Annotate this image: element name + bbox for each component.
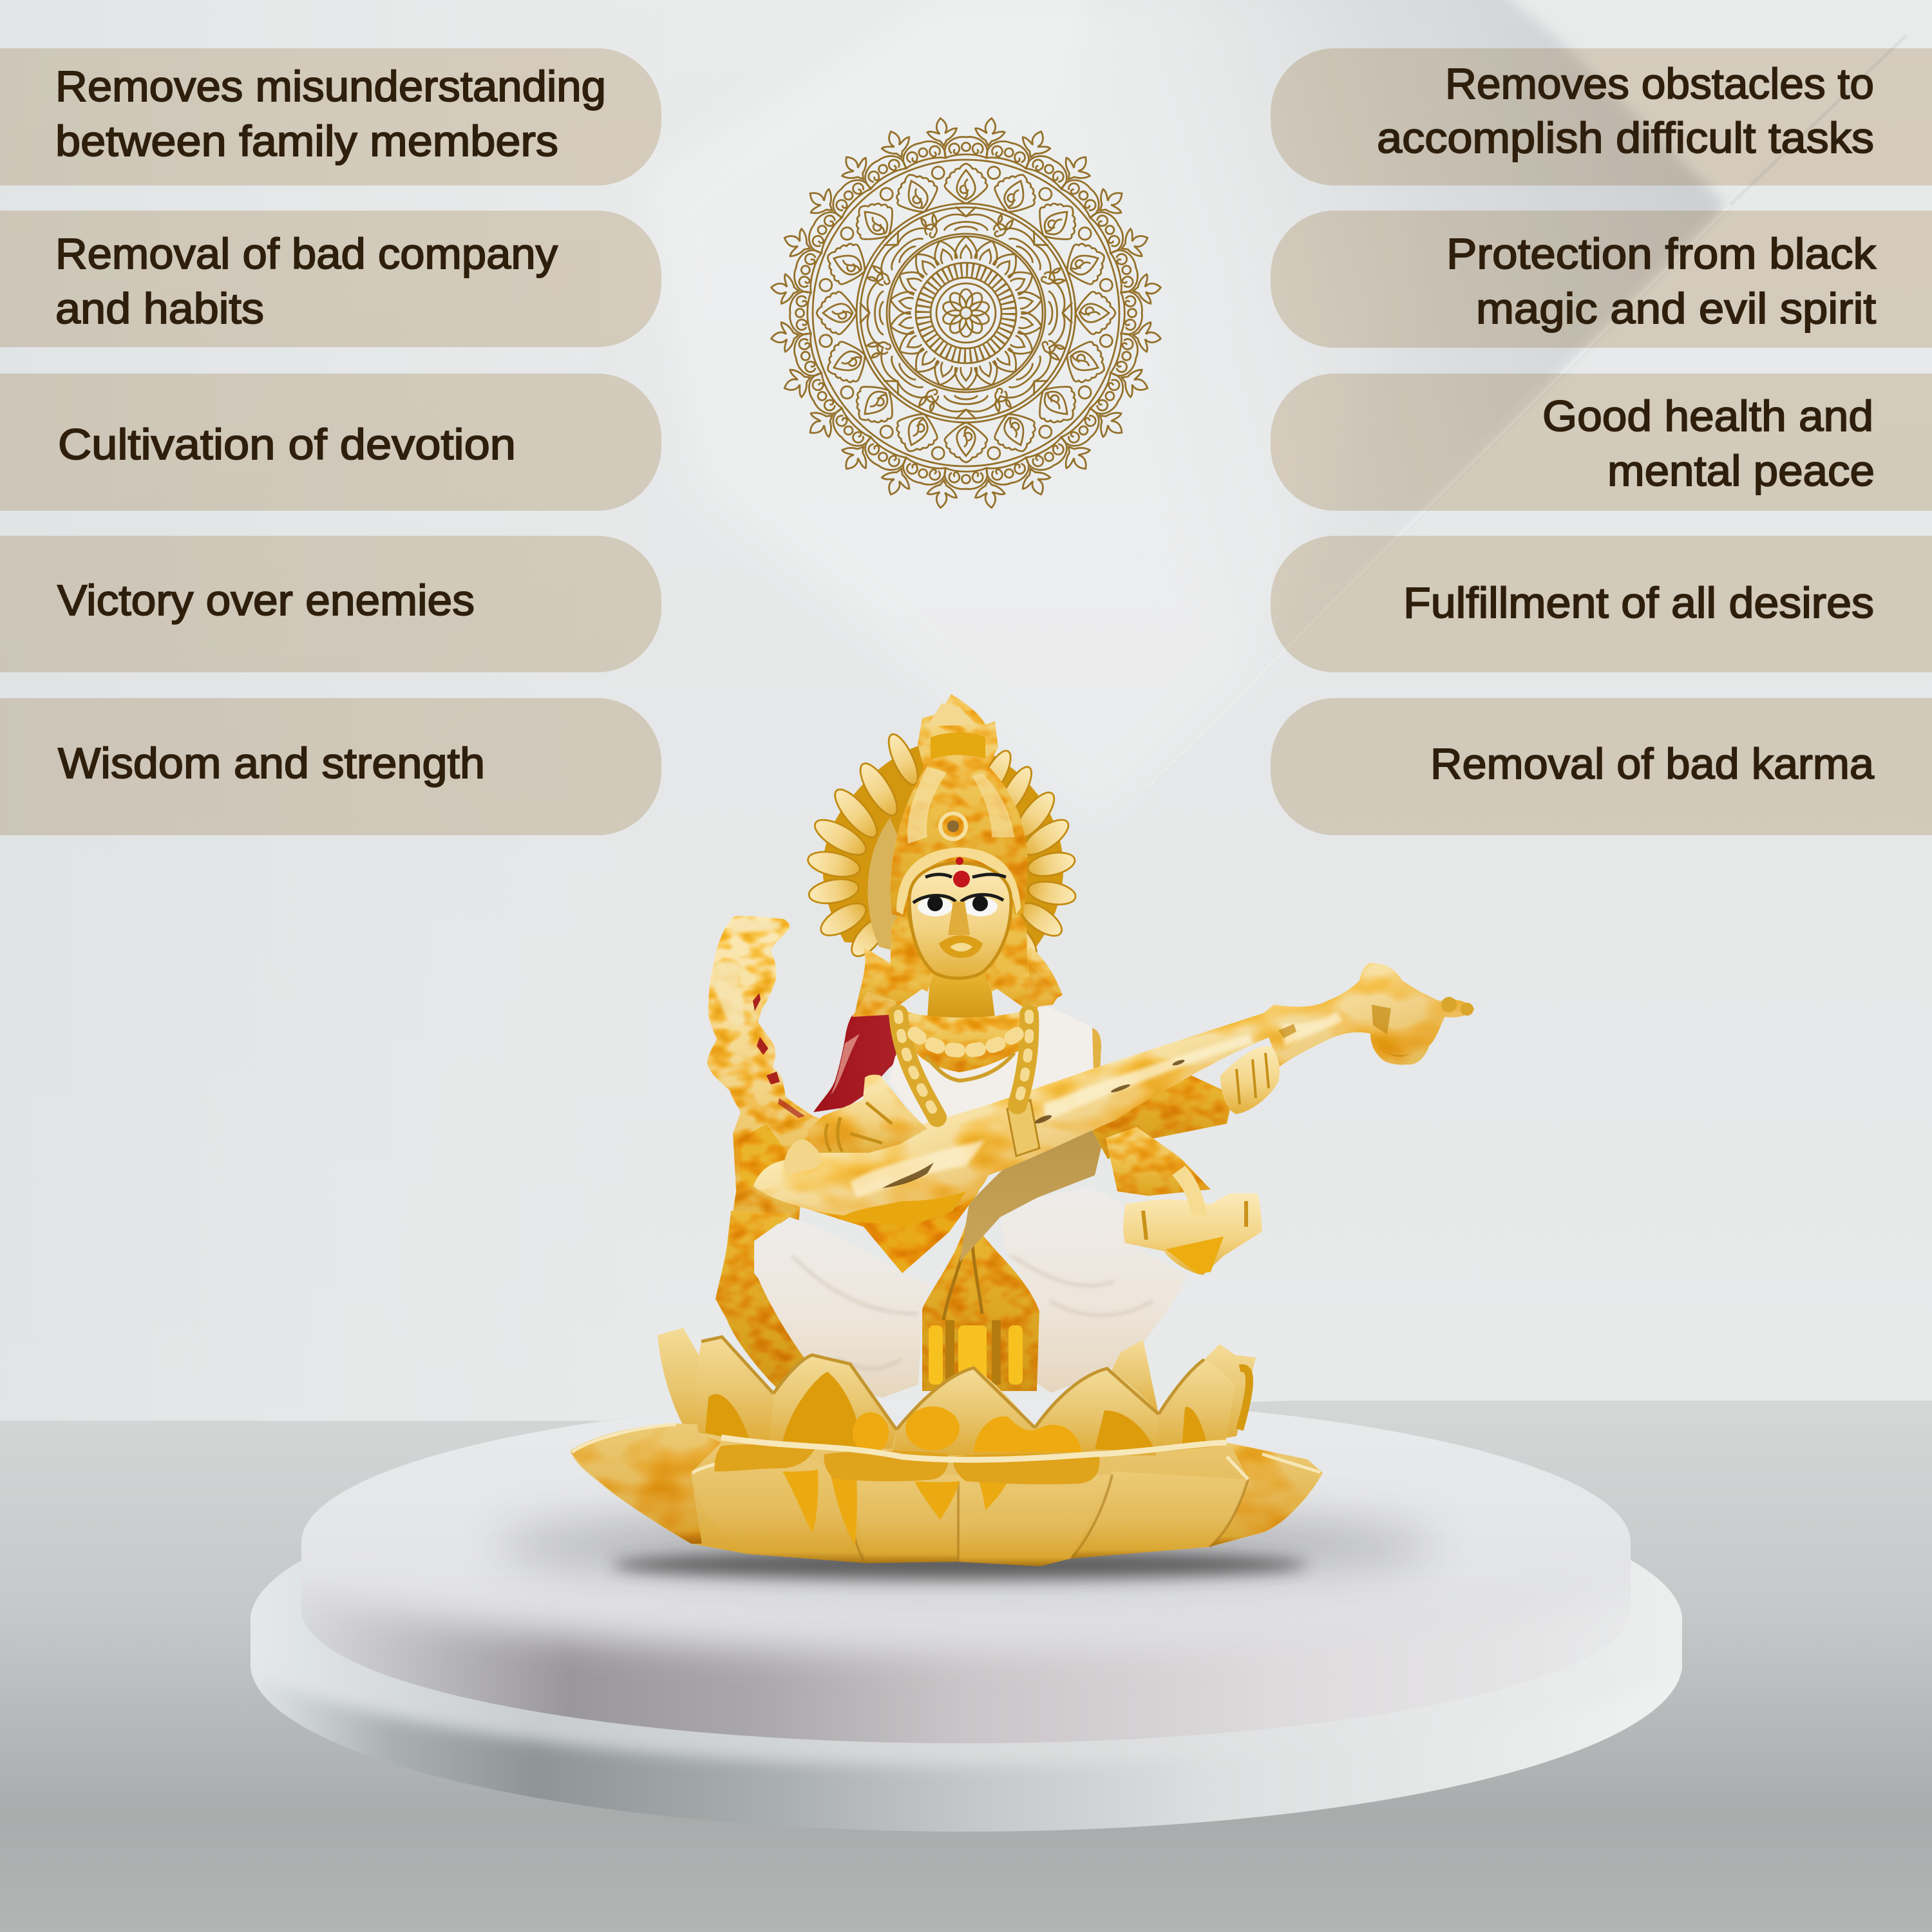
- arm highlights: [716, 919, 781, 1025]
- orange knobs: [853, 1406, 1082, 1454]
- halo ribs: [806, 730, 1077, 964]
- veena dark specks: [882, 1059, 1185, 1188]
- right knee: [1000, 1187, 1188, 1393]
- pill: bad company: and habits: [55, 285, 264, 333]
- pill: devotion: [0, 374, 661, 511]
- pill: desires: Fulfillment of all desires: [1403, 579, 1874, 627]
- irises: [927, 896, 988, 911]
- pill: family members: [0, 48, 661, 185]
- under-neck gold and right arm: [960, 1075, 1233, 1262]
- hip highlight: [737, 1124, 792, 1191]
- statue: Saraswati on lotus: [571, 694, 1475, 1566]
- pill: devotion: Cultivation of devotion: [58, 421, 516, 469]
- hand on veena neck: [1220, 1046, 1280, 1114]
- veena shine: [850, 1011, 1343, 1198]
- earrings and hair: [890, 902, 1028, 992]
- petal seams: [844, 1475, 1248, 1563]
- statue shadow: [496, 1515, 1436, 1579]
- chest necklace thin: [925, 1053, 1014, 1081]
- petal rim band: [721, 1437, 1227, 1460]
- background wall: [0, 0, 1932, 1481]
- pill: desires: [1271, 536, 1932, 672]
- icon: mandala: [766, 113, 1166, 513]
- front petal C: [958, 1475, 1112, 1566]
- hand plucking veena: [783, 1075, 927, 1175]
- pill: black magic: magic and evil spirit: [1476, 285, 1876, 333]
- lower disc of platform: [251, 1560, 1682, 1832]
- pill: obstacles: accomplish difficult tasks: [1377, 114, 1874, 162]
- halo backing: [823, 739, 1063, 954]
- veena head shadow: [1278, 1005, 1410, 1057]
- halo inner disc: [867, 818, 902, 953]
- panel: right benefit pills: [1271, 48, 1932, 835]
- pill: karma: Removal of bad karma: [1430, 740, 1875, 788]
- crossed feet: [922, 1211, 1039, 1391]
- pill: obstacles: Removes obstacles to: [1445, 60, 1874, 108]
- red shawl: [813, 1005, 896, 1112]
- pill: health: [1271, 374, 1932, 511]
- veena: [753, 963, 1475, 1227]
- pill: health: mental peace: [1607, 447, 1875, 495]
- crown halo: [806, 730, 1077, 964]
- back left leg and hip: [715, 1211, 805, 1389]
- rim highlights: [572, 1425, 1320, 1479]
- rope necklaces: [898, 1014, 1029, 1117]
- book in lower hand: [1123, 1166, 1262, 1275]
- bindi: [953, 857, 970, 887]
- outer left petal: [571, 1423, 721, 1544]
- lotus back petals: [658, 1328, 1256, 1443]
- pill: black magic: Protection from black: [1446, 230, 1877, 278]
- arm red paint: [753, 993, 805, 1118]
- pill: victory: Victory over enemies: [57, 576, 475, 625]
- lotus base: [571, 1423, 1323, 1566]
- left knee: [754, 1217, 930, 1397]
- pill: obstacles: [1271, 48, 1932, 185]
- base underlay: [571, 1423, 1323, 1566]
- pill: wisdom: Wisdom and strength: [58, 739, 485, 788]
- panel: left benefit pills: [0, 48, 661, 835]
- pill: black magic: [1271, 211, 1932, 348]
- upper disc of platform: [301, 1397, 1631, 1743]
- veena tuning peg tip: [1441, 997, 1473, 1016]
- eye lids and brows: [913, 875, 1006, 903]
- headdress: [890, 694, 1028, 918]
- pill: family members: between family members: [55, 117, 558, 166]
- front petal D: [1071, 1472, 1248, 1558]
- veena bridge: [1007, 1100, 1039, 1156]
- lotus front petals: [695, 1337, 1235, 1484]
- white torso: [889, 1005, 1101, 1124]
- pill: wisdom: [0, 698, 661, 835]
- lower arm to book: [1106, 1127, 1211, 1196]
- front petal B: [850, 1472, 958, 1563]
- pill: karma: [1271, 698, 1932, 835]
- headdress detail: [896, 703, 1021, 914]
- nose and mouth: [939, 902, 983, 958]
- pill: health: Good health and: [1542, 392, 1873, 440]
- raised left arm with hand: [707, 916, 837, 1224]
- veena bowl under: [813, 1185, 979, 1273]
- outer right petal: [1209, 1443, 1323, 1547]
- pill: victory: [0, 536, 661, 672]
- lower orange lumps: [714, 1444, 1100, 1484]
- white legs: [754, 1187, 1188, 1397]
- petal rims: [701, 1337, 1204, 1430]
- pill: bad company: [0, 211, 661, 347]
- shoulder gold masses: [855, 947, 1063, 1012]
- drips: [782, 1470, 1008, 1546]
- pill: family members: Removes misunderstanding: [55, 62, 606, 111]
- eye whites: [918, 897, 998, 916]
- orange petal reflections: [705, 1372, 1208, 1452]
- platform: [251, 1397, 1682, 1832]
- necklace and neck: [852, 963, 1061, 1072]
- pill: bad company: Removal of bad company: [55, 230, 558, 278]
- face: [909, 857, 1011, 978]
- veena bowl orange reflection: [837, 1191, 966, 1227]
- floor: [0, 1401, 1932, 1932]
- front petal A: [691, 1452, 866, 1563]
